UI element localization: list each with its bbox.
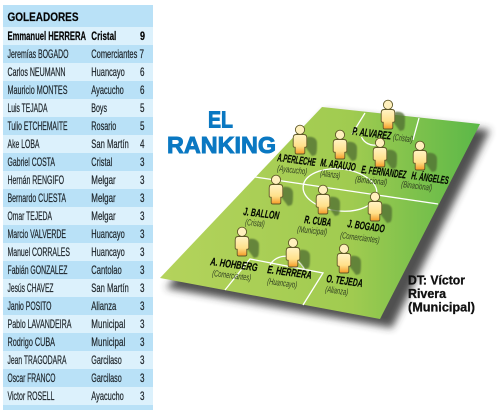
player: P. Alvarez: P. ALVAREZ bbox=[352, 126, 393, 143]
row: Rodrigo Cuba: Municipal bbox=[91, 335, 125, 349]
player: M. Araujo: (Alianza) bbox=[320, 168, 341, 180]
row: Jean Tragodara: 3 bbox=[140, 353, 145, 367]
player: J. Bogado bbox=[340, 192, 392, 245]
row: Mauricio Montes: Ayacucho bbox=[91, 83, 124, 97]
row: Janio Posito bbox=[8, 299, 145, 313]
player: J. Bogado: J. BOGADO bbox=[347, 218, 386, 236]
row: Luis Tejada: Luis TEJADA bbox=[8, 101, 48, 115]
row: Mauricio Montes: 6 bbox=[140, 83, 145, 97]
row: Victor Rosell bbox=[8, 389, 145, 403]
coach label: (Municipal) bbox=[408, 300, 475, 314]
player: J. Bogado: (Comerciantes) bbox=[340, 230, 380, 245]
row: Mauricio Montes: Mauricio MONTES bbox=[8, 83, 68, 97]
player: R. Cuba: (Municipal) bbox=[297, 224, 328, 237]
row: Jean Tragodara: Garcilaso bbox=[91, 353, 122, 367]
football field bbox=[160, 107, 490, 328]
player: M. Araujo: M. ARAUJO bbox=[320, 157, 357, 174]
row: Emmanuel Herrera: 9 bbox=[140, 29, 145, 43]
row: Marcio Valverde: Marcio VALVERDE bbox=[8, 227, 66, 241]
row: Luis Tejada bbox=[8, 101, 145, 115]
row: Carlos Neumann: Carlos NEUMANN bbox=[8, 65, 66, 79]
player: E. Fernandez: (Binacional) bbox=[355, 174, 388, 187]
player: A. Perleche: (Ayacucho) bbox=[277, 163, 308, 177]
player: E. Fernandez: E. FERNANDEZ bbox=[361, 164, 407, 182]
title: RANKING bbox=[167, 132, 276, 158]
player: R. Cuba bbox=[297, 185, 340, 237]
row: Omar Tejeda: 3 bbox=[140, 209, 145, 223]
player: A. Perleche bbox=[276, 125, 317, 177]
row: Gabriel Costa: Gabriel COSTA bbox=[8, 155, 55, 169]
player: H. Ángeles: H. ÁNGELES bbox=[411, 169, 450, 187]
row: Luis Tejada: 5 bbox=[140, 101, 145, 115]
player: A. Perleche: A.PERLECHE bbox=[276, 152, 317, 169]
player: R. Cuba: R. CUBA bbox=[304, 214, 332, 229]
player: E. Herrera: E. HERRERA bbox=[267, 264, 312, 282]
row: Carlos Neumann: 6 bbox=[140, 65, 145, 79]
row: Janio Posito: 3 bbox=[140, 299, 145, 313]
row: Oscar Franco: Oscar FRANCO bbox=[8, 371, 56, 385]
row: Omar Tejeda bbox=[8, 209, 145, 223]
row: Bernardo Cuesta: 3 bbox=[140, 191, 145, 205]
row: Omar Tejeda: Melgar bbox=[91, 209, 116, 223]
row: Jean Tragodara: Jean TRAGODARA bbox=[8, 353, 66, 367]
row: Manuel Corrales: Huancayo bbox=[91, 245, 125, 259]
row: Janio Posito: Alianza bbox=[91, 299, 117, 313]
row: Omar Tejeda: Omar TEJEDA bbox=[8, 209, 52, 223]
row: Rodrigo Cuba bbox=[8, 335, 145, 349]
row: Hernán Rengifo: Melgar bbox=[91, 173, 116, 187]
title: EL bbox=[208, 106, 233, 132]
player: A. Hohberg bbox=[209, 227, 259, 283]
row: Jesús Chavez: San Martín bbox=[91, 281, 129, 295]
player: O. Tejeda bbox=[325, 244, 363, 297]
row: Rodrigo Cuba: Rodrigo CUBA bbox=[8, 335, 55, 349]
player: H. Ángeles bbox=[401, 141, 450, 193]
row: Gabriel Costa: 3 bbox=[140, 155, 145, 169]
row: Tulio Etchemaite: Rosario bbox=[91, 119, 116, 133]
row: Fabián Gonzalez: 3 bbox=[140, 263, 145, 277]
player: A. Hohberg: (Comerciantes) bbox=[212, 268, 252, 283]
row: Hernán Rengifo: 3 bbox=[140, 173, 145, 187]
row: Jesús Chavez: Jesús CHAVEZ bbox=[8, 281, 54, 295]
coach label: Rivera bbox=[408, 286, 447, 301]
row: Pablo Lavandeira: Municipal bbox=[91, 317, 125, 331]
row: Tulio Etchemaite: Tulio ETCHEMAITE bbox=[8, 119, 68, 133]
player: E. Herrera: (Huancayo) bbox=[267, 276, 298, 290]
player: E. Fernandez bbox=[355, 138, 407, 187]
coach label bbox=[408, 272, 475, 314]
row: Jeremías Bogado: Comerciantes bbox=[91, 47, 137, 61]
row: Manuel Corrales: Manuel CORRALES bbox=[8, 245, 70, 259]
row: Emmanuel Herrera: Cristal bbox=[91, 29, 116, 43]
row: Marcio Valverde: Huancayo bbox=[91, 227, 125, 241]
row: Ake Loba bbox=[8, 137, 145, 151]
row: Hernán Rengifo: Hernán RENGIFO bbox=[8, 173, 64, 187]
player: J. Ballon: (Cristal) bbox=[245, 217, 265, 229]
row: Tulio Etchemaite: 5 bbox=[140, 119, 145, 133]
player: A. Hohberg: A. HOHBERG bbox=[209, 256, 259, 274]
row: Rodrigo Cuba: 3 bbox=[140, 335, 145, 349]
row: Fabián Gonzalez: Fabián GONZALEZ bbox=[8, 263, 68, 277]
row: Bernardo Cuesta: Melgar bbox=[91, 191, 116, 205]
player: J. Ballon: J. BALLON bbox=[243, 206, 280, 222]
row: Jesús Chavez bbox=[8, 281, 145, 295]
player: P. Alvarez bbox=[352, 100, 414, 145]
player: H. Ángeles: (Binacional) bbox=[401, 179, 433, 193]
row: Carlos Neumann: Huancayo bbox=[91, 65, 125, 79]
row: Pablo Lavandeira: Pablo LAVANDEIRA bbox=[8, 317, 72, 331]
row: Victor Rosell: Ayacucho bbox=[91, 389, 124, 403]
player: J. Ballon bbox=[243, 175, 293, 229]
row: Marcio Valverde: 3 bbox=[140, 227, 145, 241]
row: Jeremías Bogado: Jeremías BOGADO bbox=[8, 47, 68, 61]
coach label: DT: Víctor bbox=[408, 272, 465, 288]
row: Oscar Franco: Garcilaso bbox=[91, 371, 122, 385]
row: Luis Tejada: Boys bbox=[91, 101, 107, 115]
row: Oscar Franco: 3 bbox=[140, 371, 145, 385]
player: P. Alvarez: (Cristal) bbox=[392, 132, 414, 144]
row: Oscar Franco bbox=[8, 371, 145, 385]
player: O. Tejeda: O. TEJEDA bbox=[326, 273, 363, 290]
row: Emmanuel Herrera: Emmanuel HERRERA bbox=[8, 29, 86, 43]
player: O. Tejeda: (Alianza) bbox=[325, 284, 349, 297]
row: Ake Loba: 4 bbox=[140, 137, 145, 151]
panel: scorers table bbox=[3, 5, 153, 410]
row: Jeremías Bogado: 7 bbox=[140, 47, 144, 61]
row: Bernardo Cuesta: Bernardo CUESTA bbox=[8, 191, 66, 205]
row: Victor Rosell: 3 bbox=[140, 389, 145, 403]
row: Gabriel Costa bbox=[8, 155, 145, 169]
player: M. Araujo bbox=[320, 130, 357, 180]
player: E. Herrera bbox=[267, 238, 312, 290]
row: Victor Rosell: Victor ROSELL bbox=[8, 389, 55, 403]
row: Pablo Lavandeira: 3 bbox=[140, 317, 145, 331]
title bbox=[167, 106, 276, 158]
row: Fabián Gonzalez: Cantolao bbox=[91, 263, 122, 277]
table heading: GOLEADORES bbox=[8, 10, 78, 24]
row: Ake Loba: Ake LOBA bbox=[8, 137, 40, 151]
row: Gabriel Costa: Cristal bbox=[91, 155, 112, 169]
row: Jesús Chavez: 3 bbox=[140, 281, 145, 295]
row: Janio Posito: Janio POSITO bbox=[8, 299, 52, 313]
row: Ake Loba: San Martín bbox=[91, 137, 129, 151]
row: Manuel Corrales: 3 bbox=[140, 245, 145, 259]
